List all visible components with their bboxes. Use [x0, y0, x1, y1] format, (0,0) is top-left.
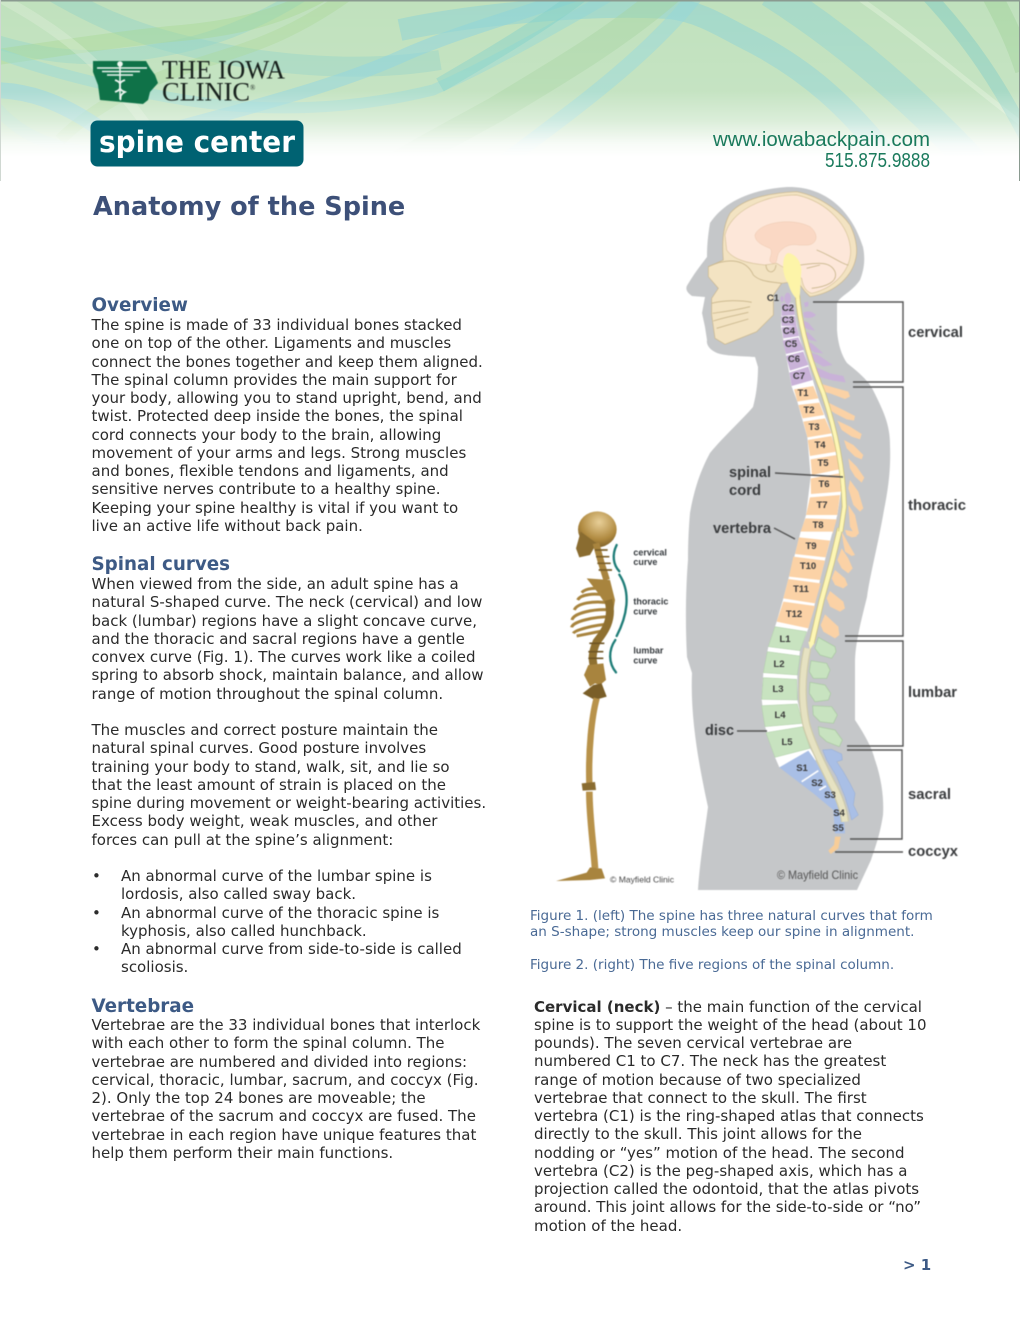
text: cervical region: Cervical (neck) – the main function of the cervical spine is to support the weight of the head (about 10 pounds). The seven cervical vertebrae are numbered C1 to C7. The neck has the greatest range of motion because of two specialized vertebrae that connect to the skull. The first vertebra (C1) is the ring-shaped atlas that connects directly to the skull. This joint allows for the nodding or “yes” motion of the head. The second vertebra (C2) is the peg-shaped axis, which has a projection called the odontoid, that the atlas pivots around. This joint allows for the side-to-side or “no” motion of the head. [534, 998, 926, 1234]
logo: The Iowa Clinic [92, 56, 286, 106]
contact details: www.iowabackpain.com [712, 129, 930, 151]
vertebra labels: L3 [772, 684, 784, 695]
text: overview: The spine is made of 33 individual bones stacked one on top of the other. Ligaments and muscles connect the bones together and keep them aligned. The spinal column provides the main support for your body, allowing you to stand upright, bend, and twist. Protected deep inside the bones, the spinal cord connects your body to the brain, allowing movement of your arms and legs. Strong muscles and bones, flexible tendons and ligaments, and sensitive nerves contribute to a healthy spine. Keeping your spine healthy is vital if you want to live an active life without back pain. [92, 316, 483, 535]
vertebra labels: C6 [788, 354, 800, 365]
vertebra labels: T7 [816, 500, 828, 511]
sacral crest [823, 749, 858, 820]
sacrum [779, 751, 845, 833]
text: spinal curves: When viewed from the side, an adult spine has a natural S-shaped curve. The neck (cervical) and low back (lumbar) regions have a slight concave curve, and the thoracic and sacral regions have a gentle convex curve (Fig. 1). The curves work like a coiled spring to absorb shock, maintain balance, and allow range of motion throughout the spinal column. The muscles and correct posture maintain the natural spinal curves. Good posture involves training your body to stand, walk, sit, and lie so that the least amount of strain is placed on the spine during movement or weight-bearing activities. Excess body weight, weak muscles, and other forces can pull at the spine’s alignment: [92, 575, 486, 848]
curve labels: cervical [633, 548, 667, 558]
skull and face [708, 192, 857, 344]
region labels: spinal [729, 464, 771, 481]
text: vertebrae: Vertebrae are the 33 individual bones that interlock with each other to form the spinal column. The vertebrae are numbered and divided into regions: cervical, thoracic, lumbar, sacrum, and coccyx (Fig. 2). Only the top 24 bones are moveable; the vertebrae of the sacrum and coccyx are fused. The vertebrae in each region have unique features that help them perform their main functions. [92, 1016, 480, 1162]
figure 1: skeleton with curves [556, 510, 674, 885]
vertebra labels: S4 [833, 808, 846, 819]
lower thoracic processes [821, 530, 857, 638]
disc spaces [781, 303, 841, 533]
spinal cord upper [797, 293, 844, 532]
vertebra labels [767, 293, 846, 834]
vertebra labels: T5 [817, 458, 829, 469]
vertebra labels: L5 [781, 737, 793, 748]
region labels: vertebra [713, 520, 772, 537]
bullet text: abnormal curves: An abnormal curve of the lumbar spine is lordosis, also called sway back. An abnormal curve of the thoracic spine is kyphosis, also called hunchback. An abnormal curve from side-to-side is called scoliosis. [121, 867, 462, 976]
vertebra labels: L1 [779, 634, 791, 645]
head anatomy [708, 192, 857, 344]
vertebra labels: L2 [773, 659, 785, 670]
heading: vertebrae: Vertebrae [92, 996, 194, 1017]
thoracic vertebrae [794, 386, 841, 533]
bullet list: abnormal curves: • • • [92, 867, 101, 958]
vertebra labels: T10 [800, 561, 816, 572]
curve labels: lumbar [633, 646, 664, 656]
region labels: cord [729, 482, 761, 499]
figure 2: spine regions [686, 186, 966, 890]
disc spaces lower [762, 532, 833, 767]
region labels: sacral [908, 786, 951, 803]
vertebra labels: S3 [824, 790, 836, 801]
curve labels: thoracic [633, 597, 668, 607]
vertebra labels: C5 [785, 339, 798, 350]
lumbar processes [809, 637, 842, 747]
vertebra labels: T4 [814, 440, 826, 451]
spinal cord lower [812, 528, 840, 643]
brain [725, 195, 851, 293]
lower thoracic vertebrae [777, 537, 830, 628]
icon: Iowa state with caduceus [93, 61, 158, 104]
contact details: 515.875.9888 [825, 150, 930, 172]
curve labels: curve [633, 606, 657, 616]
vertebra labels: C1 [767, 293, 780, 304]
vertebra labels: C3 [782, 315, 794, 326]
pituitary and cerebellum lines [766, 250, 848, 288]
vertebra labels: L4 [774, 710, 786, 721]
copyright: © Mayfield Clinic [610, 875, 674, 885]
vertebra labels: T6 [818, 479, 830, 490]
brainstem [783, 253, 801, 300]
thoracic processes [822, 384, 864, 537]
logo wordmark: THE IOWA [162, 56, 285, 84]
contact details [712, 129, 930, 172]
heading: spinal curves: Spinal curves [92, 554, 230, 575]
header banner [0, 0, 1020, 181]
region labels: disc [705, 722, 734, 739]
vertebra labels: C7 [793, 371, 805, 382]
cauda equina [803, 648, 845, 822]
vertebra labels: T1 [797, 388, 809, 399]
curve markers [610, 545, 627, 672]
curve labels [633, 548, 668, 665]
coccyx [828, 837, 841, 854]
curve labels: curve [633, 655, 657, 665]
vertebra labels: T2 [803, 405, 815, 416]
vertebra labels: C4 [783, 326, 796, 337]
skeleton [556, 511, 617, 881]
face lines [708, 261, 782, 328]
region labels: cervical [908, 324, 963, 341]
region labels: coccyx [908, 843, 959, 860]
copyright: © Mayfield Clinic [777, 868, 858, 882]
cervical vertebrae [780, 293, 813, 386]
lower spine [762, 528, 858, 854]
page number: > 1 [903, 1256, 931, 1274]
vertebra labels: S1 [796, 763, 809, 774]
vertebra labels: T9 [805, 541, 817, 552]
logo wordmark: CLINIC [162, 78, 250, 106]
vertebra labels: T12 [786, 609, 802, 620]
vertebra labels: T11 [793, 584, 810, 595]
curve labels: curve [633, 557, 657, 567]
region labels [705, 324, 966, 860]
figure captions: Figure 1. (left) The spine has three natural curves that form an S-shape; strong muscles keep our spine in alignment. Figure 2. (right) The five regions of the spinal column. [530, 908, 933, 973]
region labels: thoracic [908, 497, 966, 514]
upper spine [780, 293, 864, 537]
vertebra labels: T3 [808, 422, 820, 433]
vertebra labels: S2 [811, 778, 823, 789]
body silhouette [686, 187, 890, 890]
vertebra labels: T8 [812, 520, 824, 531]
logo wordmark [162, 56, 285, 106]
vertebra labels: S5 [832, 823, 845, 834]
spine center badge: spine center [99, 125, 296, 159]
lumbar vertebrae [762, 627, 810, 757]
vertebra labels: C2 [782, 303, 794, 314]
brain inner [755, 222, 816, 263]
region brackets [737, 302, 903, 852]
region labels: lumbar [908, 684, 957, 701]
heading: overview: Overview [92, 295, 188, 316]
logo wordmark: ® [250, 84, 256, 92]
title: Anatomy of the Spine [93, 192, 405, 222]
cervical processes [802, 302, 846, 382]
